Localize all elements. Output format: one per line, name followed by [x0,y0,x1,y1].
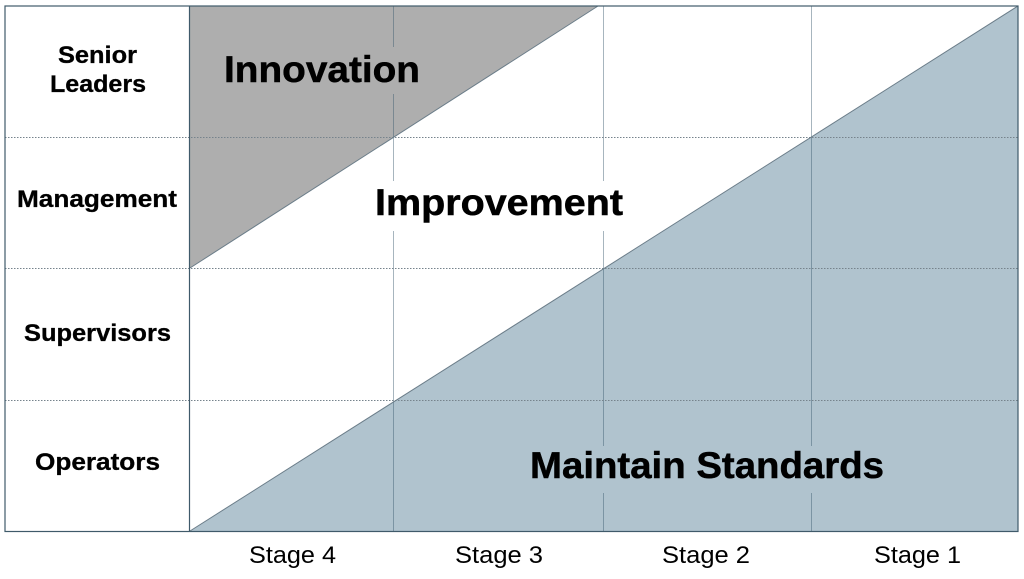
label: stage 2: Stage 2 [662,542,750,569]
row labels [17,42,177,476]
label: stage 4: Stage 4 [249,542,336,569]
label: supervisors: Supervisors [24,320,171,347]
label: stage 3: Stage 3 [455,542,543,569]
column labels [249,542,961,569]
region heading: innovation: Innovation [224,49,420,90]
label: operators: Operators [35,449,160,476]
label: stage 1: Stage 1 [874,542,961,569]
label: senior: Senior [58,42,137,69]
region: innovation triangle [190,6,598,268]
region heading: improvement: Improvement [375,182,623,223]
label: leaders: Leaders [50,71,146,98]
label: management: Management [17,186,177,213]
region: maintain standards triangle [190,6,1018,531]
region heading: maintain standards: Maintain Standards [530,445,884,486]
